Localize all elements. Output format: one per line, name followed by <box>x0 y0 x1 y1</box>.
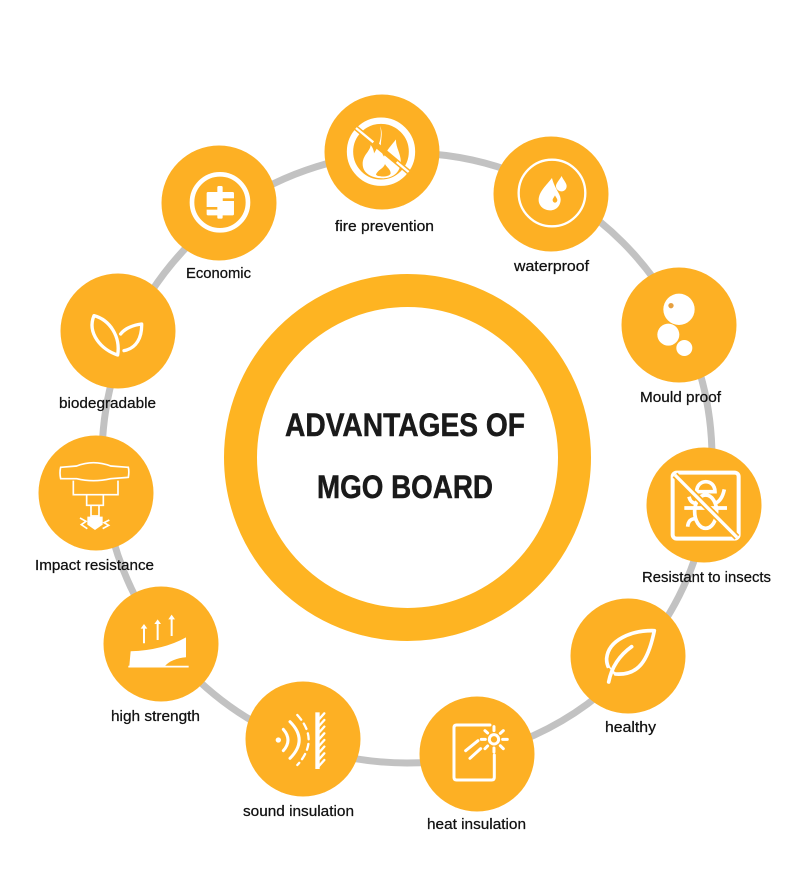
icon: bending board with arrows <box>128 615 189 667</box>
icon: sound waves and wall <box>276 712 324 769</box>
label: waterproof <box>513 259 590 275</box>
item: high strength <box>104 586 218 725</box>
icon: crossed-out bug <box>673 473 739 539</box>
title: MGO BOARD <box>317 469 493 505</box>
item: healthy <box>570 598 686 736</box>
central ring with title <box>240 290 574 624</box>
item: economic <box>162 146 276 282</box>
icon: impact hammer <box>60 463 129 530</box>
label: high strength <box>111 709 200 725</box>
item: resistant to insects <box>642 448 771 586</box>
item: sound insulation <box>243 682 360 820</box>
icon: dollar coin <box>192 174 248 230</box>
item: biodegradable <box>59 274 176 412</box>
item: waterproof <box>494 136 608 275</box>
label: Resistant to insects <box>642 570 771 586</box>
label: healthy <box>605 720 657 736</box>
icon: water drops <box>519 160 585 226</box>
label: Mould proof <box>640 390 722 406</box>
label: Impact resistance <box>35 558 154 574</box>
label: heat insulation <box>427 817 526 833</box>
item: heat insulation <box>420 696 534 833</box>
icon: mould spores <box>657 294 695 356</box>
item: mould proof <box>622 268 736 406</box>
title <box>285 407 525 505</box>
icon: two leaves <box>92 316 142 355</box>
item: impact resistance <box>35 436 154 574</box>
label: sound insulation <box>243 804 354 820</box>
label: biodegradable <box>59 396 156 412</box>
icon: sun on panel <box>454 725 507 780</box>
item: fire prevention <box>324 94 440 235</box>
title: ADVANTAGES OF <box>285 407 525 443</box>
icon: no fire <box>350 121 412 183</box>
icon: leaf <box>607 631 654 682</box>
label: Economic <box>186 266 251 282</box>
label: fire prevention <box>335 219 434 235</box>
